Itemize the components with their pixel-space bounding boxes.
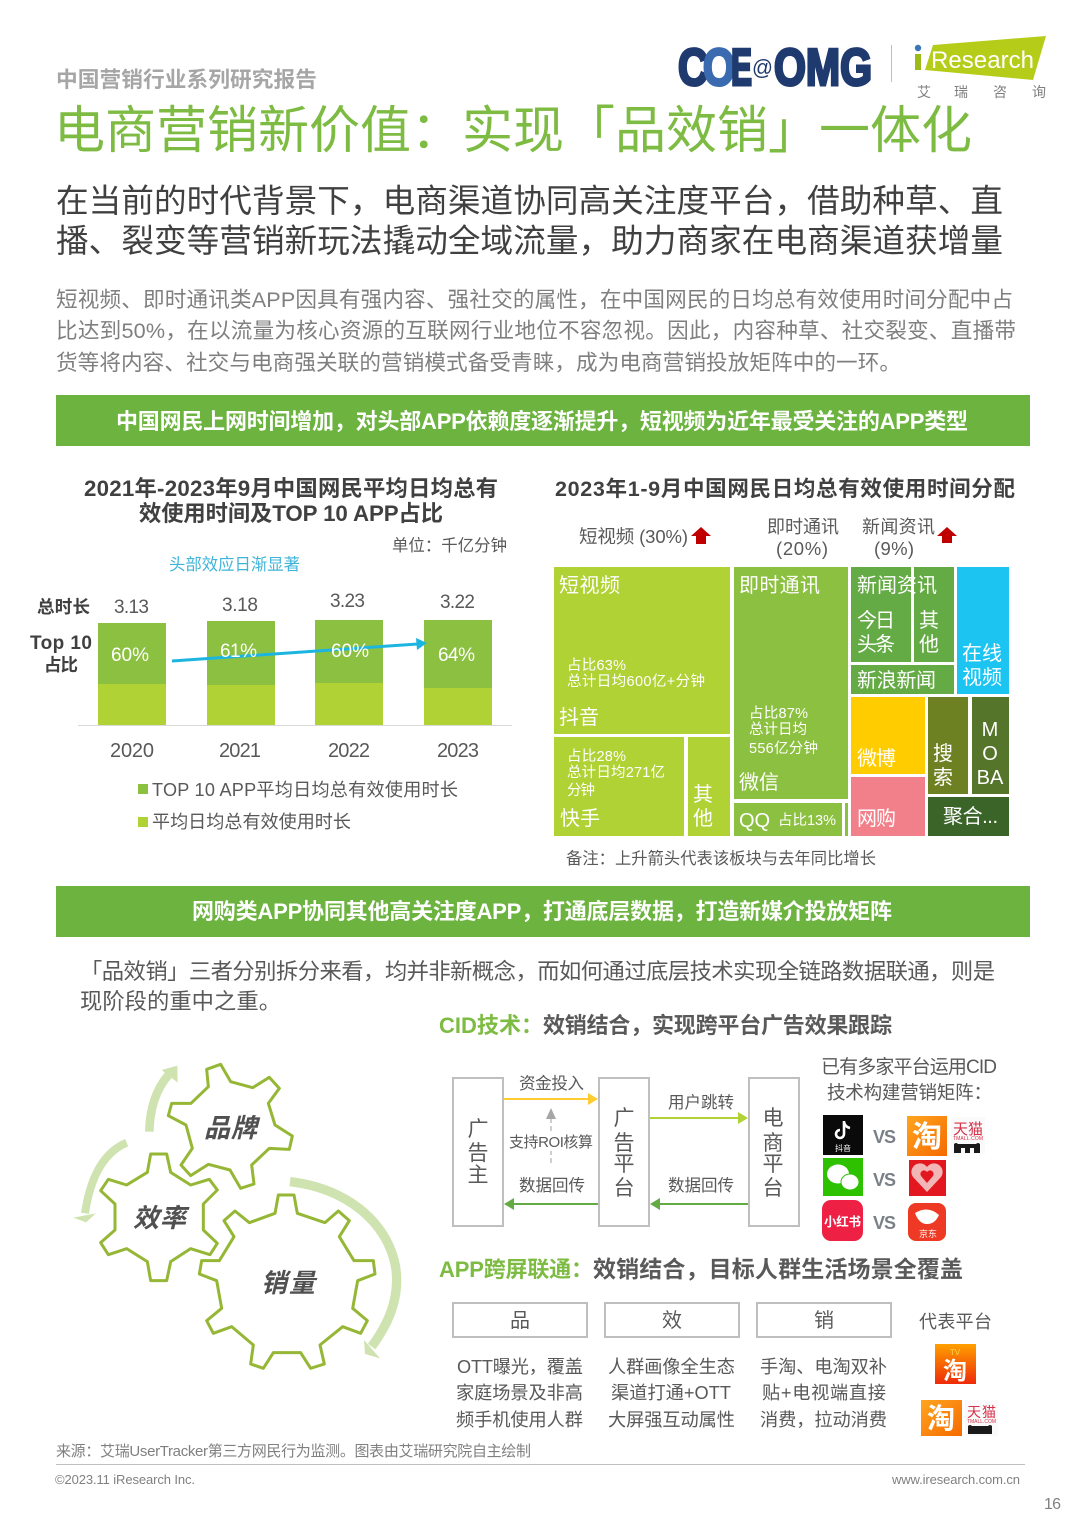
category label: news: 新闻资讯 (862, 517, 935, 537)
flow box: e-commerce platform: 平 (762, 1153, 784, 1176)
cell: QQ (734, 803, 848, 836)
section intro text (80, 959, 995, 1014)
vs labels (873, 1127, 896, 1233)
flow box: e-commerce platform: 电 (762, 1107, 784, 1130)
arrow: data return to ad platform: 数据回传 (668, 1176, 734, 1195)
cell: online shopping (851, 777, 925, 836)
column: brand (453, 1303, 587, 1430)
logo: iResearch: 瑞 (954, 84, 968, 100)
gear labels (133, 1113, 318, 1298)
gear diagram (73, 1064, 397, 1368)
icon: Taobao (907, 1116, 947, 1156)
subtitle (56, 182, 1003, 259)
icon: Tmall small (965, 1400, 998, 1436)
cell: other news (914, 567, 954, 662)
cell: other news: 他 (919, 633, 939, 656)
bars (78, 620, 512, 726)
gear labels: 销量 (261, 1268, 318, 1298)
column: sales: 销 (814, 1309, 834, 1332)
representative platforms: 代表平台 (919, 1312, 992, 1332)
cell: other short video: 其 (693, 783, 713, 806)
flow box: ad platform: 平 (614, 1153, 634, 1176)
chart heading (84, 476, 498, 526)
cell: Kuaishou: 分钟 (567, 782, 595, 799)
banner: section two (56, 886, 1030, 937)
logo: COE@OMG: O (703, 39, 735, 97)
vs labels: VS (873, 1127, 896, 1147)
section intro text: 现阶段的重中之重。 (80, 989, 281, 1014)
cell: Kuaishou (554, 737, 684, 836)
cell: Douyin (554, 567, 730, 734)
intro paragraph: 短视频、即时通讯类APP因具有强内容、强社交的属性，在中国网民的日均总有效使用时间分配中占 (56, 287, 1013, 312)
heading: CID technology: 效销结合，实现跨平台广告效果跟踪 (543, 1013, 892, 1038)
matrix caption: 已有多家平台运用CID (821, 1056, 997, 1078)
copyright: ©2023.11 iResearch Inc. (55, 1472, 195, 1487)
treemap note: 备注：上升箭头代表该板块与去年同比增长 (566, 849, 876, 868)
cell: aggregator: 聚合... (943, 805, 998, 828)
representative platforms (919, 1312, 998, 1436)
intro paragraph (56, 287, 1016, 375)
category label: instant messaging: 即时通讯 (767, 517, 839, 537)
legend: 平均日均总有效使用时长 (152, 812, 351, 832)
banner: section one: 中国网民上网时间增加，对头部APP依赖度逐渐提升，短视频为近年最受关注的APP类型 (116, 409, 968, 434)
arrow: funding: 资金投入 (519, 1074, 584, 1093)
icon: WeChat (823, 1158, 863, 1196)
icon: Douyin (823, 1115, 863, 1155)
icon: JD: 京东 (919, 1228, 937, 1239)
column: effect (605, 1303, 739, 1430)
column: sales: 贴+电视端直接 (762, 1383, 886, 1403)
report series label: 中国营销行业系列研究报告 (56, 67, 317, 92)
icon: Xiaohongshu: 小红书 (824, 1214, 861, 1229)
cell: MOBA: M (982, 719, 998, 741)
cell: Toutiao: 今日 (857, 609, 895, 632)
row labels: 总时长 (37, 597, 90, 617)
cell: other news: 其 (919, 609, 939, 632)
icon: Tmall TV Taobao (935, 1344, 976, 1385)
cell: WeChat: 总计日均 (749, 721, 807, 738)
trend arrow (172, 638, 427, 661)
cell: online shopping: 网购 (857, 807, 896, 830)
vs labels: VS (873, 1213, 896, 1233)
cell: Douyin: 抖音 (559, 706, 599, 729)
arrow: funding (504, 1074, 598, 1105)
logo: COE@OMG: @ (752, 55, 773, 80)
logo: COE@OMG: C (678, 39, 708, 97)
arrow: data return to ad platform (650, 1176, 748, 1210)
cell: WeChat: 即时通讯 (739, 574, 820, 597)
treemap heading: 2023年1-9月中国网民日均总有效使用时间分配 (555, 477, 1015, 501)
logo: iResearch: 询 (1032, 84, 1046, 100)
logo: iResearch (915, 36, 1046, 100)
category label: news: (9%) (874, 538, 914, 559)
column: sales: 消费，拉动消费 (760, 1410, 887, 1430)
intro paragraph: 比达到50%，在以流量为核心资源的互联网行业地位不容忽视。因此，内容种草、社交裂变、直播带 (56, 318, 1016, 343)
cell: MOBA: O (982, 743, 998, 765)
year axis labels: 2022 (328, 740, 370, 762)
icon: Tmall TV Taobao: 淘 (943, 1358, 967, 1385)
year axis labels: 2021 (219, 740, 261, 762)
arrow: ROI support: 支持ROI核算 (509, 1133, 593, 1151)
cell: online video: 视频 (962, 666, 1002, 689)
column: brand: OTT曝光，覆盖 (457, 1357, 583, 1377)
share values: 60% (331, 641, 369, 662)
heading: cross-screen linkage: APP跨屏联通： (439, 1257, 593, 1282)
logo: COE@OMG (678, 39, 872, 97)
flow box: advertiser: 主 (468, 1164, 488, 1187)
column: effect: 大屏强互动属性 (608, 1410, 735, 1430)
icon: Taobao small: 淘 (927, 1403, 955, 1434)
heading: cross-screen linkage: 效销结合，目标人群生活场景全覆盖 (593, 1256, 963, 1282)
share values: 64% (438, 645, 475, 666)
subtitle: 在当前的时代背景下，电商渠道协同高关注度平台，借助种草、直 (56, 182, 1003, 219)
category label: instant messaging: (20%) (776, 538, 828, 559)
total values (114, 591, 475, 618)
cell: QQ: QQ (739, 810, 770, 832)
banner: section two: 网购类APP协同其他高关注度APP，打通底层数据，打造新媒介投放矩阵 (192, 899, 892, 924)
icon: Tmall small: 天猫 (967, 1404, 996, 1420)
news heading in cell: 新闻资讯 (857, 574, 937, 597)
icon: Tmall: TMALL.COM (953, 1136, 983, 1142)
logo: iResearch: Research (931, 47, 1034, 74)
icon: Pinduoduo (909, 1160, 946, 1196)
cell: Weibo: 微博 (857, 747, 896, 770)
flow box: ad platform (599, 1078, 649, 1226)
icon: Tmall (951, 1117, 985, 1154)
unit label: 单位：千亿分钟 (392, 537, 507, 555)
chart heading: 2021年-2023年9月中国网民平均日均总有 (84, 476, 498, 501)
cell: QQ: 占比13% (778, 812, 836, 829)
icon: Tmall: 天猫 (953, 1121, 983, 1138)
trend caption: 头部效应日渐显著 (169, 555, 300, 574)
platform matrix (821, 1056, 997, 1241)
flow box: e-commerce platform: 台 (762, 1177, 784, 1200)
website: www.iresearch.com.cn (891, 1472, 1020, 1487)
column: sales: 手淘、电淘双补 (760, 1357, 887, 1377)
flow box: advertiser: 广 (468, 1118, 488, 1141)
category label: short video: 短视频 (30%) (579, 526, 688, 547)
subtitle: 播、裂变等营销新玩法撬动全域流量，助力商家在电商渠道获增量 (56, 222, 1003, 259)
total values: 3.18 (222, 595, 258, 616)
cell: Toutiao (851, 567, 911, 662)
logo: COE@OMG: E (731, 39, 752, 97)
icon: JD (908, 1203, 946, 1241)
year axis labels (110, 740, 479, 762)
cell: online video (957, 567, 1009, 694)
row labels: 占比 (44, 655, 78, 675)
cell: aggregator (928, 797, 1009, 836)
legend (138, 780, 458, 832)
column: sales (757, 1303, 891, 1430)
column: brand: 频手机使用人群 (456, 1410, 583, 1430)
logo: COE@OMG: OMG (774, 39, 872, 97)
share values: 61% (220, 641, 257, 662)
arrow: user redirect: 用户跳转 (668, 1093, 734, 1112)
cell: Kuaishou: 总计日均271亿 (567, 764, 665, 781)
flow box: ad platform: 广 (614, 1107, 634, 1130)
flow box: ad platform: 台 (614, 1177, 634, 1200)
source note: 来源：艾瑞UserTracker第三方网民行为监测。图表由艾瑞研究院自主绘制 (56, 1442, 531, 1460)
rotation arrows (73, 1066, 397, 1358)
column: effect: 渠道打通+OTT (611, 1383, 731, 1403)
cell: Kuaishou: 占比28% (567, 748, 626, 765)
cell: Toutiao: 头条 (857, 633, 895, 656)
gear labels: 品牌 (204, 1113, 261, 1143)
matrix caption (821, 1056, 997, 1103)
vs labels: VS (873, 1170, 896, 1190)
heading: CID technology: CID技术： (439, 1013, 543, 1038)
icon: Douyin: 抖音 (835, 1143, 851, 1153)
cell: WeChat: 占比87% (749, 705, 808, 722)
column: effect: 人群画像全生态 (608, 1357, 735, 1377)
cell: Sina news: 新浪新闻 (857, 669, 936, 692)
icon: Xiaohongshu (822, 1200, 863, 1241)
cell: Sina news (851, 665, 954, 694)
cell: WeChat: 556亿分钟 (749, 740, 818, 757)
total values: 3.22 (440, 592, 475, 613)
cell: WeChat: 微信 (739, 771, 779, 794)
flow box: ad platform: 告 (614, 1132, 634, 1155)
arrow: ROI support (508, 1108, 594, 1165)
logo: iResearch: 艾 (917, 84, 931, 100)
panel: treemap of usage share (554, 477, 1015, 868)
total values: 3.13 (114, 597, 149, 618)
icon: Tmall small: TMALL.COM (967, 1419, 996, 1425)
flow box: e-commerce platform: 商 (762, 1132, 784, 1155)
gear outlines (101, 1064, 375, 1368)
chart heading: 效使用时间及TOP 10 APP占比 (139, 501, 443, 526)
cell: Douyin: 占比63% (567, 657, 626, 674)
cell: search: 索 (933, 766, 953, 789)
legend: TOP 10 APP平均日均总有效使用时长 (152, 780, 458, 800)
matrix caption: 技术构建营销矩阵： (827, 1082, 992, 1103)
arrow: data return to advertiser (504, 1176, 598, 1210)
cell: search: 搜 (933, 742, 953, 765)
share values: 60% (111, 645, 149, 666)
category label: news (862, 517, 957, 559)
panel: bar chart of daily usage (30, 476, 512, 832)
column: brand: 品 (510, 1310, 530, 1332)
cell: Douyin: 短视频 (559, 574, 620, 597)
cell: WeChat (734, 567, 848, 799)
icon: Tmall TV Taobao: TV (950, 1348, 961, 1357)
year axis labels: 2020 (110, 740, 154, 762)
flow box: advertiser (453, 1078, 503, 1226)
cell: MOBA: BA (977, 767, 1004, 789)
intro paragraph: 货等将内容、社交与电商强关联的营销模式备受青睐，成为电商营销投放矩阵中的一环。 (56, 350, 901, 375)
cell: online video: 在线 (962, 642, 1002, 665)
gear labels: 效率 (133, 1203, 190, 1233)
total values: 3.23 (330, 591, 365, 612)
row labels (30, 597, 92, 675)
flow box: e-commerce platform (749, 1078, 799, 1226)
share values (111, 641, 475, 666)
column: brand: 家庭场景及非高 (456, 1383, 583, 1403)
page number: 16 (1044, 1496, 1061, 1513)
logo: iResearch: 咨 (993, 84, 1007, 100)
icon: Taobao: 淘 (912, 1121, 942, 1154)
title: 电商营销新价值：实现「品效销」一体化 (54, 102, 972, 159)
cell: Douyin: 总计日均600亿+分钟 (567, 673, 705, 690)
flow diagram (453, 1074, 799, 1226)
category label: instant messaging (767, 517, 839, 559)
cell: other short video (688, 737, 730, 836)
cell: MOBA (972, 697, 1009, 794)
cell: search (928, 697, 968, 794)
section intro text: 「品效销」三者分别拆分来看，均并非新概念，而如何通过底层技术实现全链路数据联通，则是 (80, 959, 995, 984)
year axis labels: 2023 (437, 740, 479, 762)
cell: Weibo (851, 697, 925, 774)
flow box: advertiser: 告 (468, 1142, 488, 1165)
arrow: data return to advertiser: 数据回传 (519, 1176, 585, 1195)
column: effect: 效 (662, 1309, 682, 1332)
arrow: user redirect (650, 1093, 748, 1124)
cell: other short video: 他 (693, 807, 713, 830)
banner: section one (56, 395, 1030, 446)
row labels: Top 10 (30, 633, 92, 654)
cell: Kuaishou: 快手 (560, 807, 600, 830)
